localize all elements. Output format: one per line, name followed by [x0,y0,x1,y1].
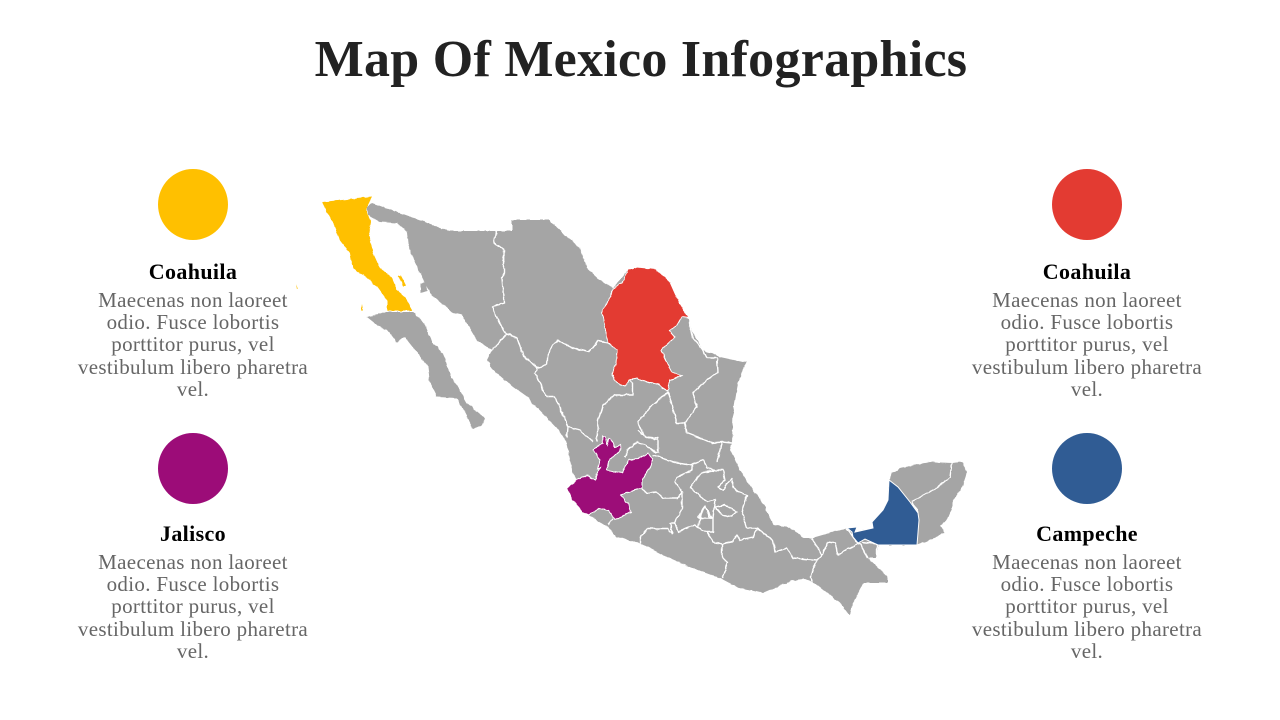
text block: odio. Fusce lobortis [1001,310,1173,334]
text block: vel. [177,377,209,401]
text block: vel. [1071,639,1103,663]
text block: Maecenas non laoreet [98,288,288,312]
Isla Tiburon [421,281,427,293]
text block: vel. [177,639,209,663]
text block: vestibulum libero pharetra [972,355,1202,379]
text block: Maecenas non laoreet [992,550,1182,574]
Baja California Sur [367,312,485,429]
text block: odio. Fusce lobortis [107,310,279,334]
text block: Maecenas non laoreet [98,550,288,574]
text block: vel. [1071,377,1103,401]
icon: purple circle [158,433,228,504]
text block: Maecenas non laoreet [992,288,1182,312]
Jalisco highlighted in purple [567,435,653,520]
text block: vestibulum libero pharetra [972,617,1202,641]
text block [78,288,308,401]
heading: Coahuila: Coahuila [1043,259,1131,284]
panel: Coahuila yellow [78,169,308,401]
panel: Coahuila red [972,169,1202,401]
heading: Jalisco: Jalisco [160,521,226,546]
text block [78,550,308,663]
heading: Coahuila: Coahuila [149,259,237,284]
text block: vestibulum libero pharetra [78,617,308,641]
heading: Campeche: Campeche [1036,521,1138,546]
title: Map Of Mexico Infographics [315,31,967,88]
Campeche highlighted in blue [847,480,919,545]
Coahuila highlighted in red [602,267,689,391]
text block: odio. Fusce lobortis [107,572,279,596]
text block [972,550,1202,663]
text block: porttitor purus, vel [1005,332,1169,356]
text block: odio. Fusce lobortis [1001,572,1173,596]
Baja California highlighted in yellow [296,197,413,311]
panel: Campeche [972,433,1202,663]
text block: vestibulum libero pharetra [78,355,308,379]
state borders [492,231,952,583]
text block: porttitor purus, vel [111,594,275,618]
text block: porttitor purus, vel [111,332,275,356]
icon: blue circle [1052,433,1122,504]
icon: yellow circle [158,169,228,240]
text block: porttitor purus, vel [1005,594,1169,618]
mainland grey states [367,203,967,616]
icon: red circle [1052,169,1122,240]
panel: Jalisco [78,433,308,663]
text block [972,288,1202,401]
